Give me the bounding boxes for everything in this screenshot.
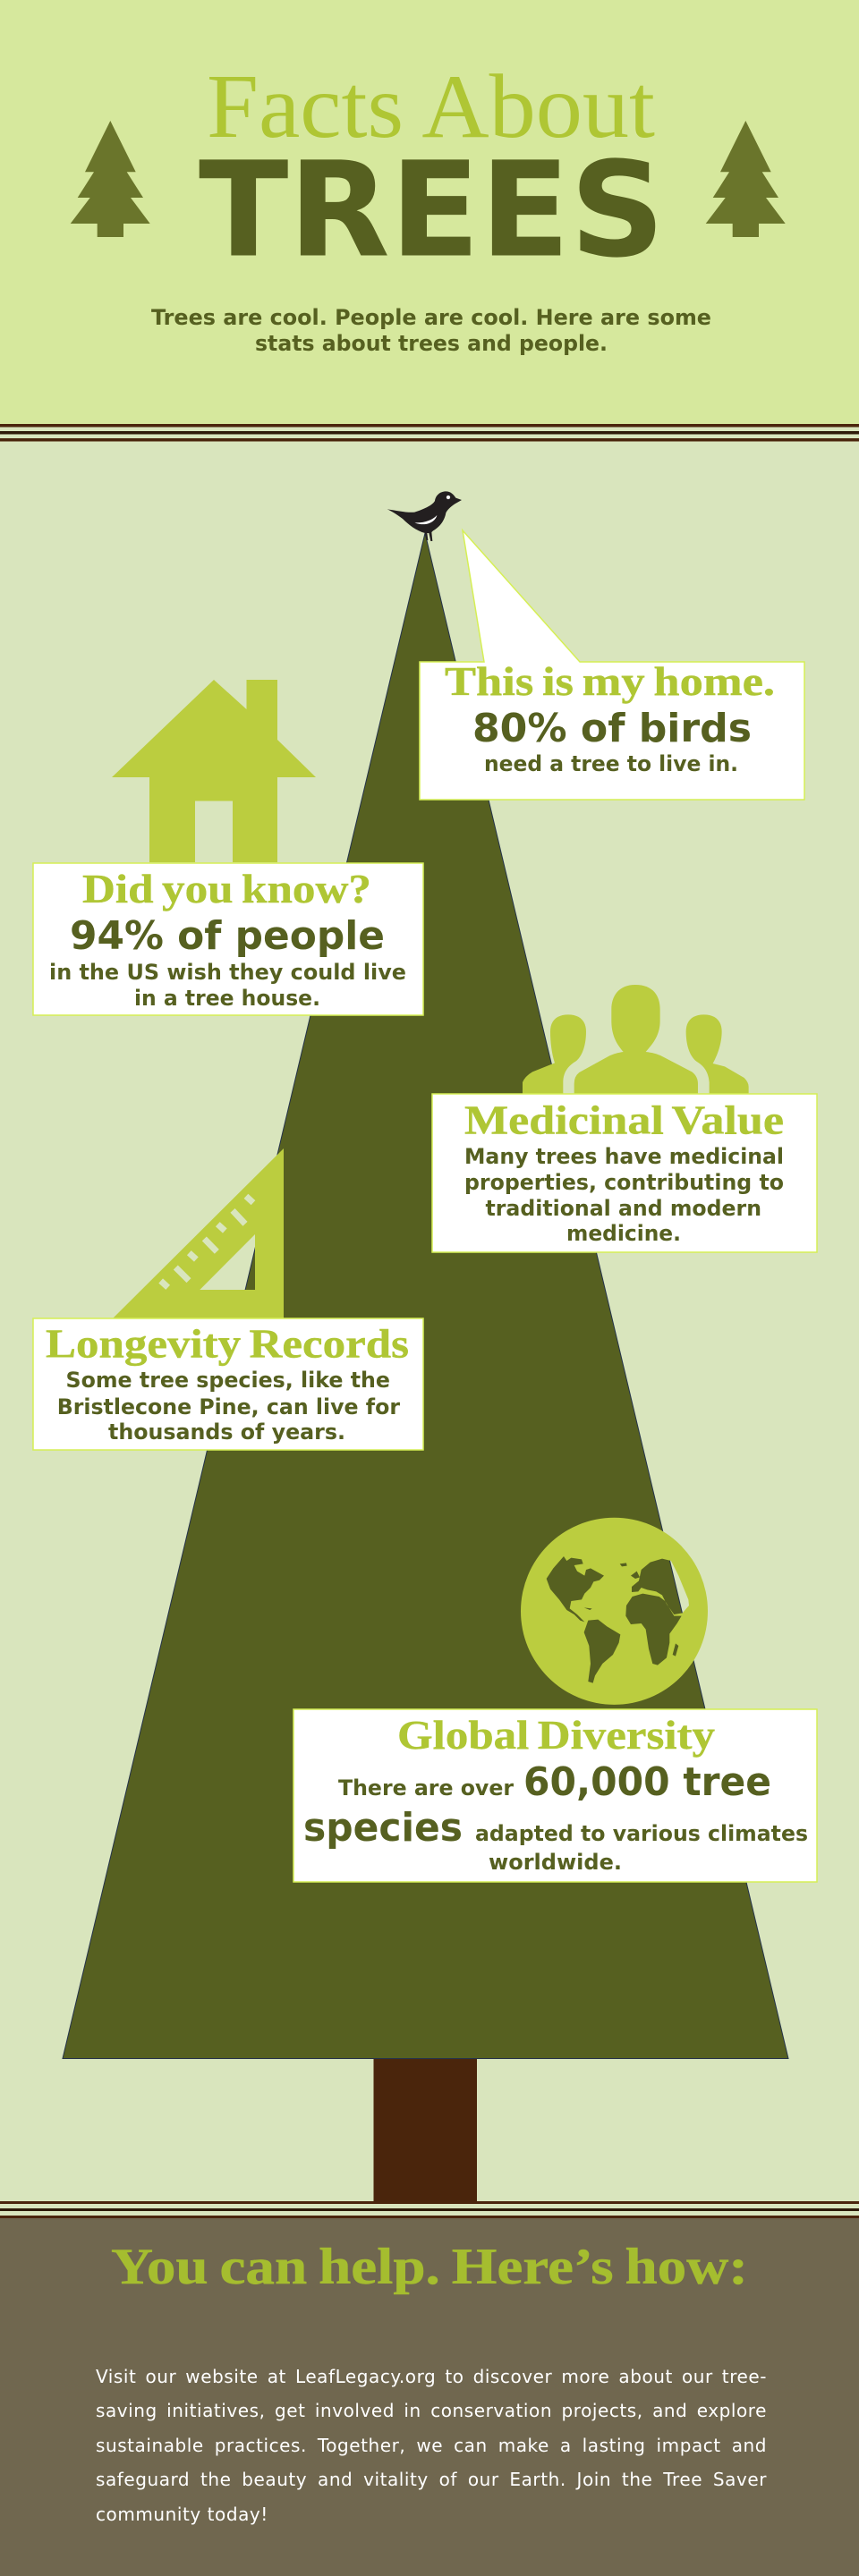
- footer panel: [0, 2218, 859, 2576]
- title: TREES: TREES: [199, 134, 665, 286]
- footer text: [96, 2366, 767, 2525]
- callout heading: This is my home.: [445, 658, 775, 704]
- panel text: in a tree house.: [134, 986, 320, 1011]
- panel heading: Longevity Records: [46, 1320, 409, 1367]
- callout: This is my home: [420, 530, 804, 800]
- subtitle: stats about trees and people.: [255, 331, 608, 356]
- icon: set square ruler: [112, 1148, 284, 1319]
- panel: did you know: [33, 863, 423, 1015]
- panel text: [464, 1144, 784, 1246]
- panel: global diversity: [293, 1709, 817, 1882]
- footer text: community today!: [96, 2504, 268, 2525]
- callout text: need a tree to live in.: [484, 751, 738, 776]
- panel text: [57, 1368, 400, 1445]
- footer text: safeguard the beauty and vitality of our Earth. Join the Tree Saver: [96, 2469, 767, 2490]
- panel text: Some tree species, like the: [66, 1368, 390, 1393]
- panel text: [49, 960, 406, 1011]
- panel heading: Medicinal Value: [464, 1097, 784, 1143]
- panel text: traditional and modern: [485, 1196, 761, 1221]
- tree trunk: [374, 2058, 477, 2204]
- footer text: saving initiatives, get involved in conservation projects, and explore: [96, 2400, 767, 2421]
- stat: 80% of birds: 80% of birds: [472, 706, 752, 751]
- icon: bird: [387, 491, 462, 541]
- icon: right pine tree: [706, 121, 786, 237]
- subtitle: Trees are cool. People are cool. Here are some: [151, 305, 711, 330]
- panel: longevity records: [33, 1318, 423, 1450]
- panel text: in the US wish they could live: [49, 960, 406, 985]
- icon: house: [112, 680, 316, 862]
- stat: 94% of people: 94% of people: [70, 913, 385, 959]
- panel text: Bristlecone Pine, can live for: [57, 1394, 400, 1419]
- footer heading: You can help. Here’s how:: [111, 2239, 748, 2295]
- panel text: [303, 1759, 808, 1875]
- subtitle: [151, 305, 711, 356]
- icon: left pine tree: [71, 121, 150, 237]
- big tree: [63, 533, 788, 2059]
- header panel: [0, 0, 859, 424]
- panel text: There are over: [338, 1775, 514, 1801]
- footer text: sustainable practices. Together, we can make a lasting impact and: [96, 2435, 767, 2456]
- panel: medicinal value: [432, 1094, 817, 1252]
- panel text: thousands of years.: [108, 1419, 345, 1445]
- title: Facts About: Facts About: [207, 56, 655, 157]
- panel text: worldwide.: [489, 1850, 622, 1875]
- footer stripes: [0, 2201, 859, 2218]
- panel heading: Global Diversity: [397, 1712, 715, 1758]
- panel text: medicine.: [566, 1221, 681, 1246]
- panel text: properties, contributing to: [464, 1170, 784, 1195]
- icon: people: [523, 985, 749, 1094]
- icon: globe: [521, 1518, 708, 1705]
- panel heading: Did you know?: [82, 866, 371, 911]
- panel text: 60,000 tree: [523, 1759, 771, 1805]
- panel text: adapted to various climates: [475, 1821, 808, 1846]
- footer text: Visit our website at LeafLegacy.org to discover more about our tree-: [96, 2366, 767, 2387]
- panel text: species: [303, 1805, 463, 1851]
- panel text: Many trees have medicinal: [464, 1144, 784, 1169]
